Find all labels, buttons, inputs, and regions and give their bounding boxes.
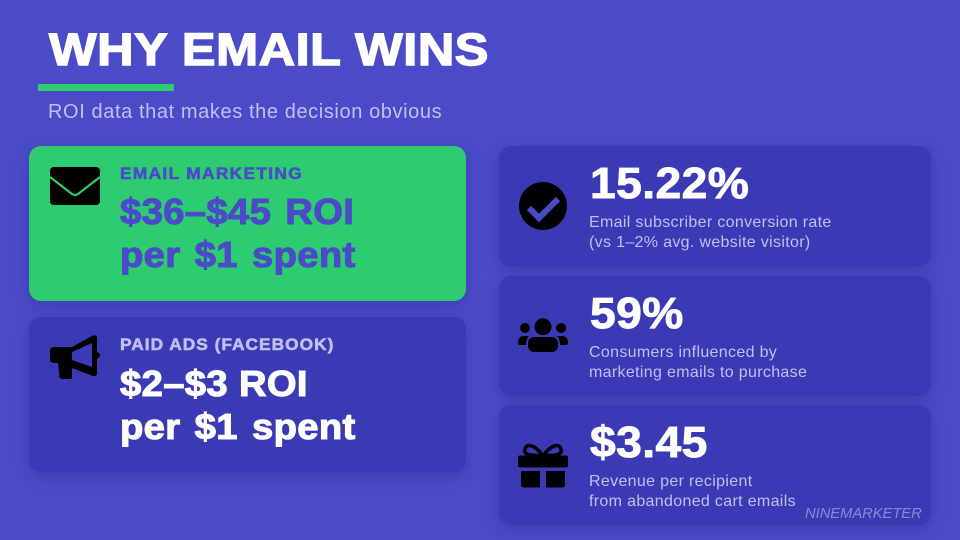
stat number: $3.45 xyxy=(590,418,708,467)
panel background xyxy=(499,405,931,525)
panel background xyxy=(499,146,931,266)
icon: megaphone xyxy=(50,335,100,379)
panel: cart revenue xyxy=(496,405,934,532)
panel: paid ads xyxy=(26,317,470,480)
panel background xyxy=(29,317,466,472)
title accent bar xyxy=(38,84,174,91)
ROI value: per $1 spent xyxy=(120,234,356,275)
label: PAID ADS (FACEBOOK) xyxy=(120,336,334,354)
description: from abandoned cart emails xyxy=(589,493,796,510)
panel background xyxy=(29,146,466,301)
panel background xyxy=(499,276,931,396)
ROI value: per $1 spent xyxy=(120,406,356,447)
panel: consumers influenced xyxy=(496,276,934,403)
description: marketing emails to purchase xyxy=(589,364,807,381)
icon: envelope xyxy=(50,167,100,205)
ROI value: $36–$45 ROI xyxy=(120,191,354,232)
description xyxy=(589,344,807,381)
watermark: NINEMARKETER xyxy=(805,506,922,522)
description: Email subscriber conversion rate xyxy=(589,214,832,231)
ROI value xyxy=(120,191,356,275)
title: WHY EMAIL WINS xyxy=(48,24,488,75)
icon: gift xyxy=(518,444,568,488)
icon: check circle xyxy=(519,182,567,230)
subtitle: ROI data that makes the decision obvious xyxy=(48,101,442,123)
panel: conversion rate xyxy=(496,146,934,273)
icon: people group xyxy=(518,318,568,352)
description: Consumers influenced by xyxy=(589,344,777,361)
panel: email marketing xyxy=(26,146,470,308)
description xyxy=(589,473,796,510)
description xyxy=(589,214,832,251)
description: Revenue per recipient xyxy=(589,473,752,490)
ROI value: $2–$3 ROI xyxy=(120,363,308,404)
stat number: 59% xyxy=(590,289,684,338)
description: (vs 1–2% avg. website visitor) xyxy=(589,234,811,251)
label: EMAIL MARKETING xyxy=(120,165,303,183)
stat number: 15.22% xyxy=(590,159,749,208)
ROI value xyxy=(120,363,356,447)
